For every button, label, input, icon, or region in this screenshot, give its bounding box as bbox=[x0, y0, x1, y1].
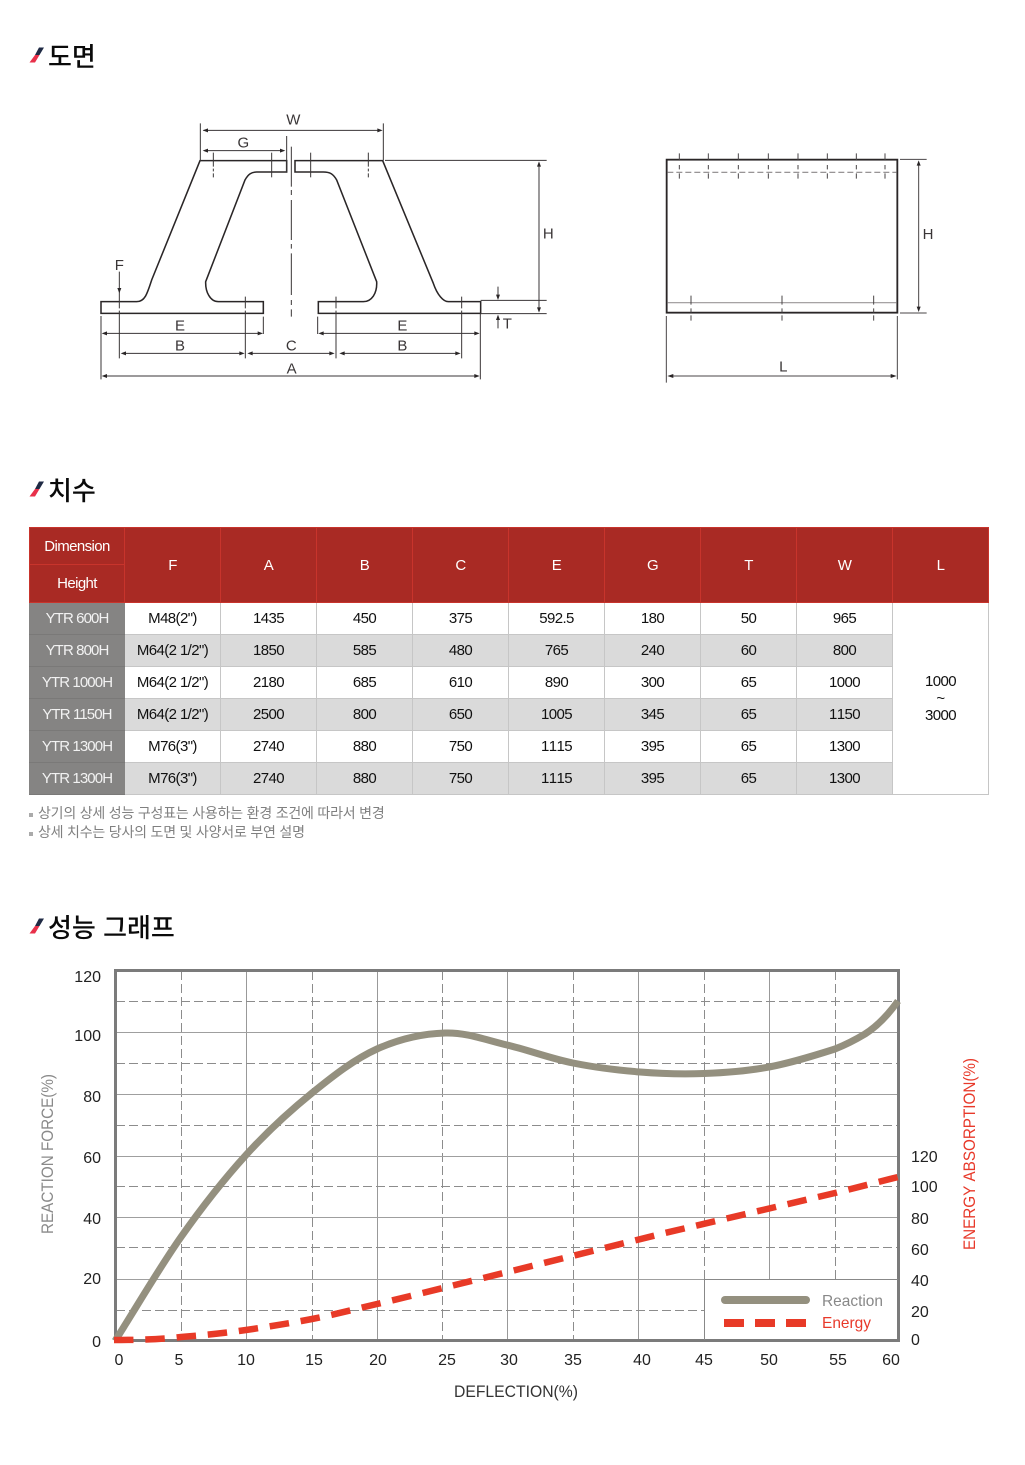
table: dimensions: 3000 bbox=[925, 707, 956, 724]
right axis numbers: 60 bbox=[911, 1242, 929, 1259]
legend: Energy bbox=[822, 1315, 871, 1332]
bottom axis numbers: 50 bbox=[760, 1352, 778, 1369]
diagram: front view of fender: G bbox=[238, 135, 249, 152]
diagram: side view of fender bbox=[666, 153, 933, 383]
left axis numbers: 20 bbox=[83, 1271, 101, 1288]
table: dimensions: 610 bbox=[449, 674, 472, 691]
table: dimensions: 480 bbox=[449, 642, 472, 659]
bottom axis numbers: 25 bbox=[438, 1352, 456, 1369]
diagram: front view of fender: A bbox=[287, 360, 297, 377]
table: dimensions: 395 bbox=[641, 770, 664, 787]
right axis numbers: 120 bbox=[911, 1149, 938, 1166]
table: dimensions: 1115 bbox=[541, 738, 572, 755]
table: dimensions: 1000 bbox=[829, 674, 860, 691]
table: dimensions: 685 bbox=[353, 674, 376, 691]
table: dimensions: T bbox=[744, 556, 753, 574]
left axis title: REACTION FORCE(%) bbox=[38, 1074, 57, 1234]
diagram: front view of fender: B bbox=[397, 338, 407, 355]
table: dimensions: 395 bbox=[641, 738, 664, 755]
table: dimensions: 345 bbox=[641, 706, 664, 723]
legend bbox=[724, 1293, 883, 1332]
table: dimensions: G bbox=[647, 556, 658, 574]
diagram: side view of fender: H bbox=[923, 226, 933, 243]
diagram: front view of fender: C bbox=[286, 338, 297, 355]
bottom axis numbers: 5 bbox=[175, 1352, 184, 1369]
table notes: 상세 치수는 당사의 도면 및 사양서로 부연 설명 bbox=[38, 824, 305, 840]
table: dimensions: 800 bbox=[353, 706, 376, 723]
table: dimensions: 240 bbox=[641, 642, 664, 659]
table: dimensions: 1115 bbox=[541, 770, 572, 787]
table: dimensions: W bbox=[838, 556, 851, 574]
table: dimensions: YTR 1300H bbox=[42, 770, 112, 787]
right axis numbers: 0 bbox=[911, 1332, 920, 1349]
bottom axis numbers: 40 bbox=[633, 1352, 651, 1369]
left axis numbers: 40 bbox=[83, 1211, 101, 1228]
table: dimensions: M76(3") bbox=[148, 738, 197, 755]
table: dimensions: A bbox=[264, 556, 273, 574]
table: dimensions: 300 bbox=[641, 674, 664, 691]
performance chart bbox=[38, 969, 979, 1401]
table: dimensions: C bbox=[455, 556, 466, 574]
left axis numbers: 0 bbox=[92, 1334, 101, 1351]
bottom axis numbers: 60 bbox=[882, 1352, 900, 1369]
table: dimensions: 2740 bbox=[253, 738, 284, 755]
table: dimensions: 800 bbox=[833, 642, 856, 659]
table: dimensions: Height bbox=[57, 575, 97, 592]
table: dimensions: M64(2 1/2") bbox=[137, 674, 208, 691]
table: dimensions: F bbox=[168, 556, 177, 574]
bottom axis numbers: 15 bbox=[305, 1352, 323, 1369]
table: dimensions: 592.5 bbox=[539, 610, 574, 627]
diagram: front view of fender: W bbox=[286, 111, 301, 128]
table: dimensions: 65 bbox=[741, 770, 756, 787]
legend: Reaction bbox=[822, 1293, 883, 1310]
table: dimensions: 650 bbox=[449, 706, 472, 723]
table: dimensions: L bbox=[937, 556, 944, 574]
table: dimensions: YTR 1300H bbox=[42, 738, 112, 755]
table: dimensions: 1000 bbox=[925, 673, 956, 690]
table notes bbox=[29, 805, 385, 840]
diagram: front view of fender: F bbox=[115, 257, 124, 274]
left axis numbers: 80 bbox=[83, 1089, 101, 1106]
table: dimensions: 50 bbox=[741, 610, 756, 627]
bottom axis numbers: 30 bbox=[500, 1352, 518, 1369]
bottom axis numbers: 35 bbox=[564, 1352, 582, 1369]
table: dimensions: M64(2 1/2") bbox=[137, 706, 208, 723]
right axis numbers: 100 bbox=[911, 1179, 938, 1196]
diagram: front view of fender: E bbox=[397, 318, 407, 335]
table: dimensions: YTR 800H bbox=[46, 642, 108, 659]
table: dimensions: 585 bbox=[353, 642, 376, 659]
bottom axis numbers: 0 bbox=[115, 1352, 124, 1369]
table: dimensions: 750 bbox=[449, 738, 472, 755]
table: dimensions: 375 bbox=[449, 610, 472, 627]
heading: performance graph: 성능 그래프 bbox=[48, 912, 175, 942]
legend background bbox=[705, 1280, 898, 1340]
table: dimensions: 880 bbox=[353, 738, 376, 755]
table: dimensions: E bbox=[552, 556, 561, 574]
right axis title: ENERGY ABSORPTION(%) bbox=[960, 1058, 979, 1250]
diagram: side view of fender: L bbox=[779, 358, 788, 375]
table: dimensions: 60 bbox=[741, 642, 756, 659]
table: dimensions bbox=[29, 527, 989, 795]
table: dimensions: 65 bbox=[741, 738, 756, 755]
table: dimensions: M64(2 1/2") bbox=[137, 642, 208, 659]
table: dimensions: M48(2") bbox=[148, 610, 197, 627]
x axis title: DEFLECTION(%) bbox=[454, 1382, 578, 1401]
right axis numbers: 40 bbox=[911, 1273, 929, 1290]
frame bbox=[116, 970, 898, 1340]
table: dimensions: 2180 bbox=[253, 674, 284, 691]
table: dimensions: ~ bbox=[936, 690, 945, 707]
table: dimensions: 65 bbox=[741, 674, 756, 691]
table: dimensions: 765 bbox=[545, 642, 568, 659]
heading: drawing: 도면 bbox=[48, 42, 96, 72]
table: dimensions: 965 bbox=[833, 610, 856, 627]
table: dimensions: B bbox=[360, 556, 369, 574]
right axis numbers: 20 bbox=[911, 1304, 929, 1321]
table: dimensions: 2740 bbox=[253, 770, 284, 787]
table: dimensions: 1150 bbox=[829, 706, 860, 723]
diagram: front view of fender bbox=[100, 111, 554, 380]
bottom axis numbers: 10 bbox=[237, 1352, 255, 1369]
table: dimensions: 65 bbox=[741, 706, 756, 723]
diagram: front view of fender: T bbox=[503, 315, 512, 332]
left axis numbers: 120 bbox=[74, 969, 101, 986]
left axis numbers: 100 bbox=[74, 1028, 101, 1045]
table: dimensions: YTR 1000H bbox=[42, 674, 112, 691]
table: dimensions: 2500 bbox=[253, 706, 284, 723]
bottom axis numbers bbox=[115, 1352, 900, 1369]
right axis numbers: 80 bbox=[911, 1211, 929, 1228]
bottom axis numbers: 55 bbox=[829, 1352, 847, 1369]
table: dimensions: 880 bbox=[353, 770, 376, 787]
table: dimensions: 180 bbox=[641, 610, 664, 627]
bottom axis numbers: 20 bbox=[369, 1352, 387, 1369]
table: dimensions: YTR 600H bbox=[46, 610, 108, 627]
table: dimensions: 1005 bbox=[541, 706, 572, 723]
table: dimensions: 1850 bbox=[253, 642, 284, 659]
heading: dimensions: 치수 bbox=[48, 476, 96, 506]
bottom axis numbers: 45 bbox=[695, 1352, 713, 1369]
reaction curve bbox=[115, 1001, 898, 1341]
energy curve bbox=[114, 1177, 898, 1340]
diagram: front view of fender: E bbox=[175, 318, 185, 335]
table: dimensions: 450 bbox=[353, 610, 376, 627]
left axis numbers bbox=[74, 969, 101, 1351]
table: dimensions: YTR 1150H bbox=[42, 706, 112, 723]
table: dimensions: Dimension bbox=[44, 538, 110, 554]
diagram: front view of fender: B bbox=[175, 338, 185, 355]
table notes: 상기의 상세 성능 구성표는 사용하는 환경 조건에 따라서 변경 bbox=[38, 805, 385, 821]
table: dimensions: 1300 bbox=[829, 738, 860, 755]
table: dimensions: 1435 bbox=[253, 610, 284, 627]
diagram: front view of fender: H bbox=[543, 225, 554, 242]
table: dimensions: M76(3") bbox=[148, 770, 197, 787]
table: dimensions: 1300 bbox=[829, 770, 860, 787]
left axis numbers: 60 bbox=[83, 1150, 101, 1167]
table: dimensions: 890 bbox=[545, 674, 568, 691]
table: dimensions: 750 bbox=[449, 770, 472, 787]
right axis numbers bbox=[911, 1149, 938, 1349]
